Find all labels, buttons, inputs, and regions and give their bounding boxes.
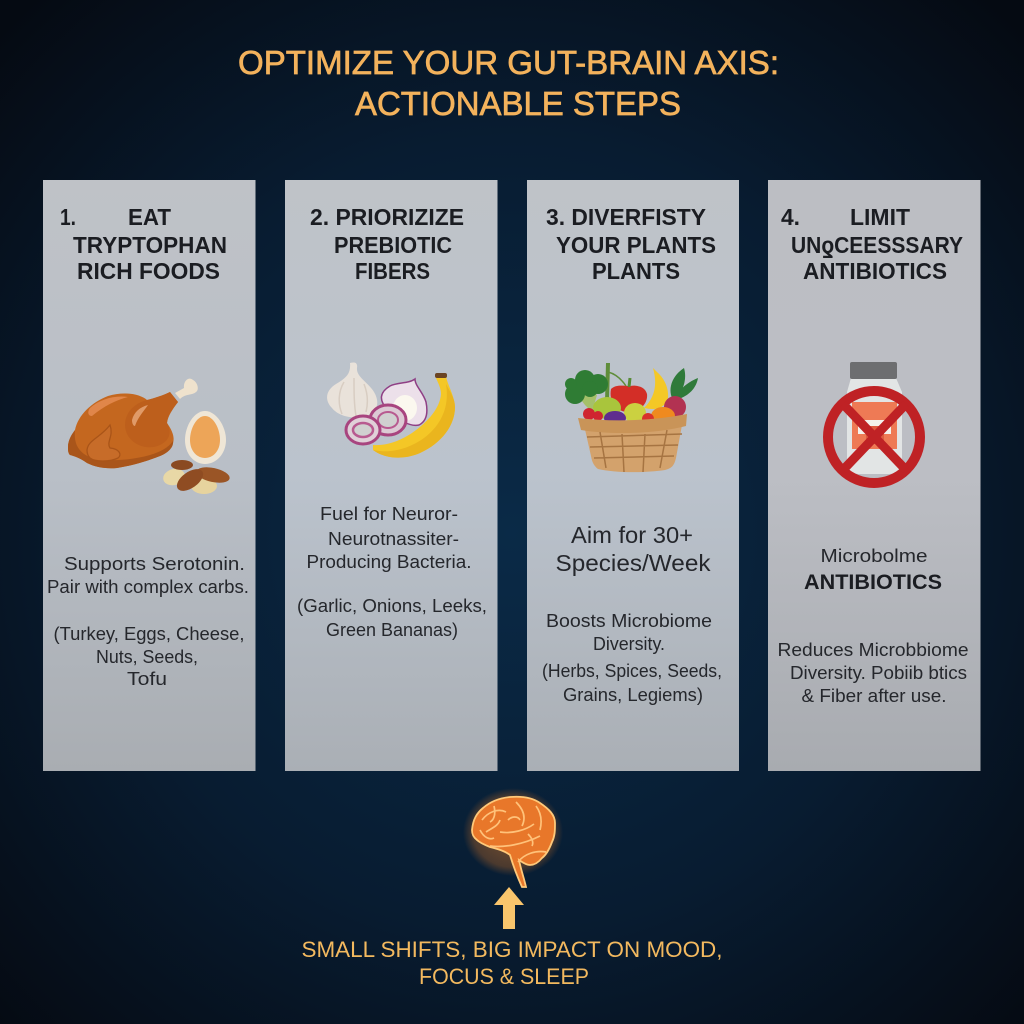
- text: step 4 callout: [804, 546, 942, 594]
- text: step 3 description: Diversity.: [593, 634, 665, 654]
- panel: step 2 prebiotic fibers: [285, 180, 498, 771]
- icon: garlic, onion and banana: [327, 363, 455, 458]
- text: step 4 callout: ANTIBIOTICS: [804, 571, 942, 594]
- heading: step 3: [546, 204, 716, 284]
- title: OPTIMIZE YOUR GUT-BRAIN AXIS:: [238, 44, 779, 81]
- heading: step 4: ANTIBIOTICS: [803, 258, 947, 284]
- text: step 1 description: [47, 554, 249, 689]
- text: step 3 description: Boosts Microbiome: [546, 611, 712, 631]
- text: step 4 description: [778, 640, 968, 706]
- footer text: SMALL SHIFTS, BIG IMPACT ON MOOD,: [302, 937, 722, 962]
- panel: step 4 limit antibiotics: [768, 180, 980, 771]
- text: step 2 description: Fuel for Neuror-: [320, 504, 458, 524]
- arrow: pointing up to brain: [494, 887, 524, 929]
- heading: step 3: YOUR PLANTS: [556, 232, 716, 258]
- panel: step 1 tryptophan rich foods: [43, 180, 256, 771]
- heading: step 4: LIMIT: [850, 204, 910, 230]
- title: [238, 44, 779, 122]
- text: step 2 description: (Garlic, Onions, Leeks,: [297, 596, 487, 616]
- text: step 4 description: & Fiber after use.: [802, 686, 946, 706]
- icon: glowing brain: [463, 788, 563, 887]
- icon: turkey, egg and nuts: [68, 379, 231, 495]
- heading: step 1: TRYPTOPHAN: [73, 232, 227, 258]
- text: step 3 description: (Herbs, Spices, Seeds,: [542, 661, 722, 681]
- heading: step 2: [310, 204, 464, 284]
- heading: step 3: PLANTS: [592, 258, 680, 284]
- heading: step 4: [781, 204, 963, 284]
- text: step 3 description: Grains, Legiems): [563, 685, 703, 705]
- text: step 3 callout: Aim for 30+: [571, 522, 693, 548]
- heading: step 4: UNƍCEESSSARY: [791, 232, 963, 258]
- footer text: [302, 937, 722, 989]
- text: step 1 description: (Turkey, Eggs, Cheese,: [54, 624, 244, 644]
- heading: step 1: RICH FOODS: [77, 258, 220, 284]
- text: step 4 description: Diversity. Pobiib btics: [790, 663, 967, 683]
- heading: step 2: PREBIOTIC: [334, 232, 452, 258]
- heading: step 1: EAT: [128, 204, 171, 230]
- heading: step 2: 2. PRIORIZIZE: [310, 204, 464, 230]
- text: step 1 description: Supports Serotonin.: [64, 554, 245, 574]
- text: step 3 description: [542, 611, 722, 705]
- text: step 1 description: Nuts, Seeds,: [96, 647, 198, 667]
- text: step 4 callout: Microbolme: [820, 546, 928, 566]
- text: step 4 description: Reduces Microbbiome: [778, 640, 968, 660]
- icon: vegetable and fruit basket: [565, 363, 698, 472]
- heading: step 4: 4.: [781, 204, 800, 230]
- text: step 2 description: [297, 504, 487, 640]
- heading: step 3: 3. DIVERFISTY: [546, 204, 706, 230]
- text: step 3 callout: Species/Week: [556, 550, 711, 576]
- text: step 3 callout: [556, 522, 711, 576]
- icon: crossed-out pill bottle: [828, 362, 920, 483]
- heading: step 1: [60, 204, 227, 284]
- text: step 2 description: Green Bananas): [326, 620, 458, 640]
- text: step 2 description: Neurotnassiter-: [328, 529, 459, 549]
- text: step 1 description: Tofu: [127, 669, 167, 689]
- heading: step 1: 1.: [60, 204, 76, 230]
- text: step 2 description: Producing Bacteria.: [306, 552, 472, 572]
- footer text: FOCUS & SLEEP: [419, 964, 589, 989]
- title: ACTIONABLE STEPS: [355, 85, 681, 122]
- text: step 1 description: Pair with complex carbs.: [47, 577, 249, 597]
- heading: step 2: FIBERS: [355, 258, 430, 284]
- panel: step 3 diversify plants: [527, 180, 739, 771]
